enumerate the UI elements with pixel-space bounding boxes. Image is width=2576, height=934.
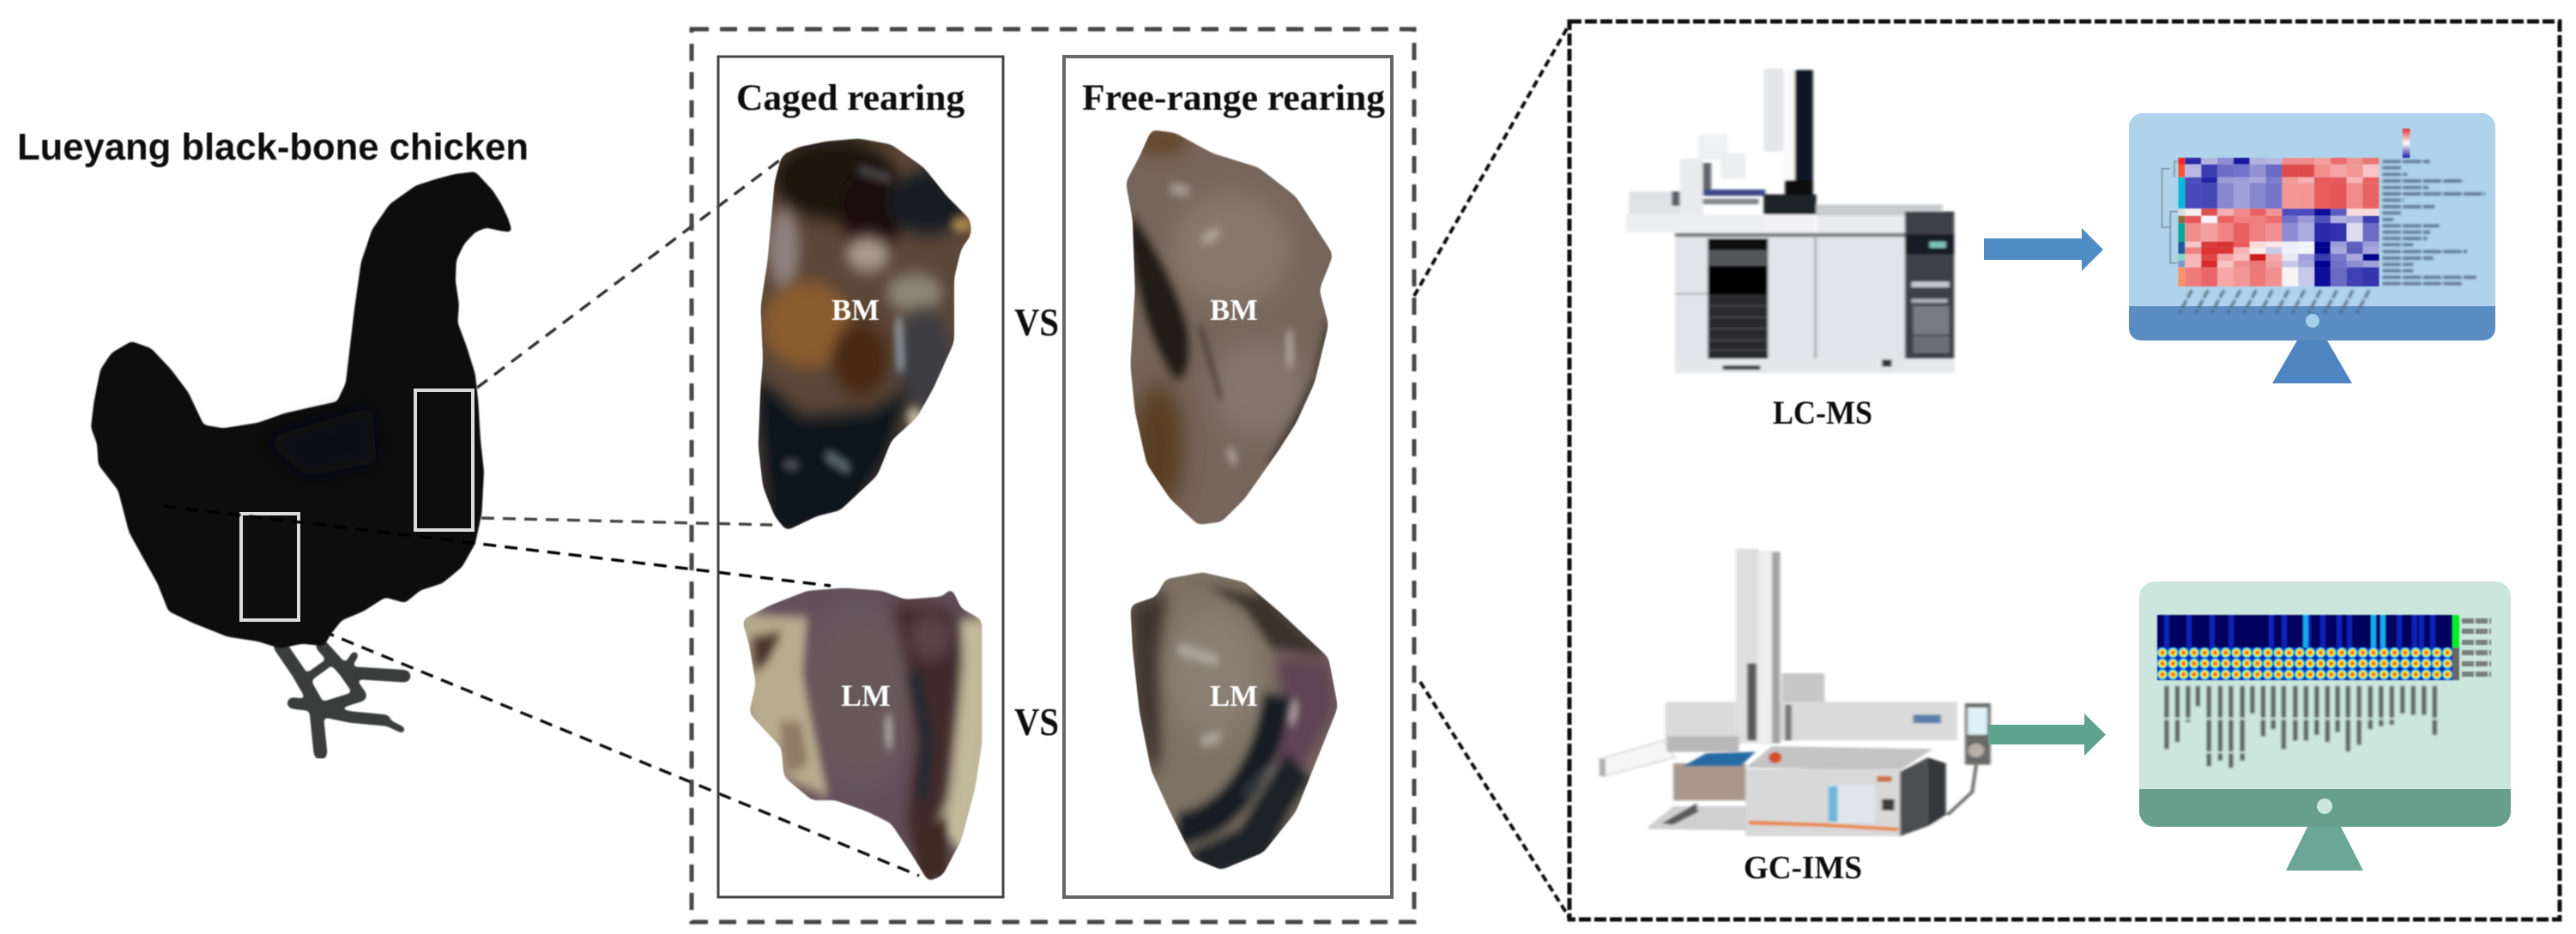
heatmap column label marks [2180, 290, 2369, 313]
title: Lueyang black-bone chicken [17, 127, 529, 168]
caged rearing frame [718, 57, 1003, 897]
instrument: LC-MS [1626, 69, 1954, 373]
gallery plot: blue streaks [2167, 615, 2433, 648]
gallery plot: compound label marks [2167, 686, 2434, 768]
monitor button [2317, 798, 2332, 814]
tissue label: caged BM: BM [831, 293, 880, 327]
arrow: LC-MS to heatmap [1984, 228, 2103, 271]
heatmap colour legend [2403, 129, 2410, 158]
monitor stand [2286, 827, 2363, 871]
dashed box: analysis [1569, 21, 2560, 919]
instrument label: GC-IMS: GC-IMS [1744, 850, 1862, 886]
free-range heading: Free-range rearing [1082, 77, 1385, 118]
heatmap cells [2185, 158, 2379, 286]
heatmap title mark [2252, 140, 2315, 148]
sample photo: free-range leg muscle [1123, 568, 1347, 875]
comparison label: VS breast: VS [1014, 301, 1059, 344]
monitor stand [2272, 340, 2352, 383]
sample photo: caged breast muscle [752, 133, 979, 539]
instrument: GC-IMS [1599, 549, 1991, 836]
monitor bezel [2139, 789, 2511, 827]
tissue label: caged LM: LM [841, 678, 891, 713]
arrow: GC-IMS to gallery plot [1988, 714, 2106, 756]
chicken legs and toes [281, 646, 405, 753]
heatmap row label marks [2383, 161, 2485, 284]
instrument label: LC-MS: LC-MS [1773, 395, 1872, 431]
gallery plot: high-intensity rows [2157, 648, 2452, 680]
gallery plot [2157, 615, 2491, 680]
free-range frame [1064, 57, 1392, 897]
monitor: GC-IMS results [2139, 581, 2511, 871]
heatmap dendrogram [2162, 161, 2177, 263]
gallery plot: low-intensity rows [2157, 615, 2452, 648]
sampling box: leg [241, 514, 299, 620]
dashed connector lines to analysis box [1414, 24, 1569, 918]
tissue label: free-range LM: LM [1210, 679, 1258, 713]
dashed leader lines from chicken to tissue samples [164, 154, 919, 876]
chicken wing sheen [263, 407, 377, 476]
gallery plot: group bars [2452, 615, 2459, 648]
comparison label: VS leg: VS [1014, 701, 1059, 744]
panel: caged rearing [718, 57, 1003, 897]
monitor screen [2139, 581, 2511, 789]
gallery plot: sample label marks [2462, 621, 2491, 674]
monitor button [2306, 314, 2319, 328]
dashed box: tissue comparison [692, 29, 1414, 922]
panel: free-range rearing [1064, 57, 1392, 897]
chicken photograph [91, 172, 512, 753]
heatmap group colour bar [2179, 158, 2185, 286]
tissue label: free-range BM: BM [1210, 293, 1258, 327]
sample photo: free-range breast muscle [1126, 130, 1333, 525]
sampling box: breast [415, 390, 473, 530]
monitor: LC-MS results [2129, 113, 2495, 383]
monitor screen [2129, 113, 2495, 306]
sample photo: caged leg muscle [738, 580, 989, 887]
gallery plot: bright cyan streaks [2306, 615, 2383, 648]
heatmap: metabolites [2162, 129, 2485, 313]
chicken body silhouette [91, 172, 512, 648]
caged rearing heading: Caged rearing [736, 77, 964, 118]
monitor bezel [2129, 306, 2495, 340]
